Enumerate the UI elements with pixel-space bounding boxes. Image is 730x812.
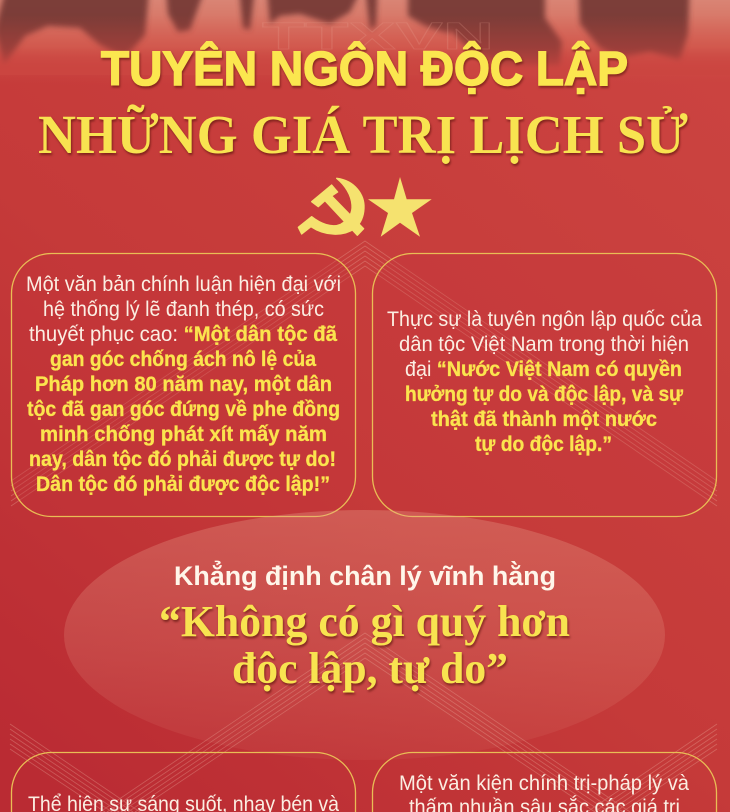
- panel: bottom left: [12, 752, 356, 812]
- panel: declaration of nationhood: [372, 254, 716, 516]
- icon: hammer and sickle: [298, 178, 364, 235]
- panel: declaration of nationhood: hưởng tự do và độc lập, và sự: [405, 382, 683, 406]
- panel: declaration of nationhood: thật đã thành một nước: [431, 407, 657, 431]
- panel: declaration of nationhood: đại “Nước Việt Nam có quyền: [405, 357, 682, 381]
- panel: modern political text: tộc đã gan góc đứng về phe đồng: [27, 397, 340, 421]
- panel: modern political text: thuyết phục cao: “Một dân tộc đã: [29, 322, 338, 346]
- decorative chevron lines: [10, 241, 717, 812]
- panel: modern political text: gan góc chống ách nô lệ của: [50, 347, 317, 371]
- panel: bottom right: Một văn kiện chính trị-pháp lý và: [399, 771, 689, 795]
- panel: declaration of nationhood: Thực sự là tuyên ngôn lập quốc của: [387, 307, 702, 331]
- callout heading: Khẳng định chân lý vĩnh hằng: [174, 559, 556, 591]
- historical photo backdrop: [0, 0, 730, 75]
- panel: modern political text: Một văn bản chính luận hiện đại với: [26, 272, 341, 296]
- panel: modern political text: [12, 254, 356, 516]
- central ellipse callout: [64, 510, 665, 760]
- title line 1: TUYÊN NGÔN ĐỘC LẬP: [101, 41, 628, 96]
- panel: declaration of nationhood: dân tộc Việt Nam trong thời hiện: [399, 332, 689, 356]
- icon: star: [368, 177, 432, 237]
- title line 2: NHỮNG GIÁ TRỊ LỊCH SỬ: [38, 104, 688, 165]
- panel: declaration of nationhood: tự do độc lập.”: [475, 432, 612, 456]
- panel: modern political text: minh chống phát xít mấy năm: [40, 422, 327, 446]
- panel: modern political text: nay, dân tộc đó phải được tự do!: [29, 447, 336, 471]
- watermark: TTXVN: [262, 16, 494, 58]
- callout quote line 2: độc lập, tự do”: [232, 644, 508, 693]
- panel: bottom right: [372, 752, 716, 812]
- callout quote line 1: “Không có gì quý hơn: [159, 597, 570, 646]
- panel: modern political text: Dân tộc đó phải được độc lập!”: [36, 472, 330, 496]
- panel: modern political text: Pháp hơn 80 năm nay, một dân: [35, 372, 332, 396]
- panel: modern political text: hệ thống lý lẽ đanh thép, có sức: [43, 297, 324, 321]
